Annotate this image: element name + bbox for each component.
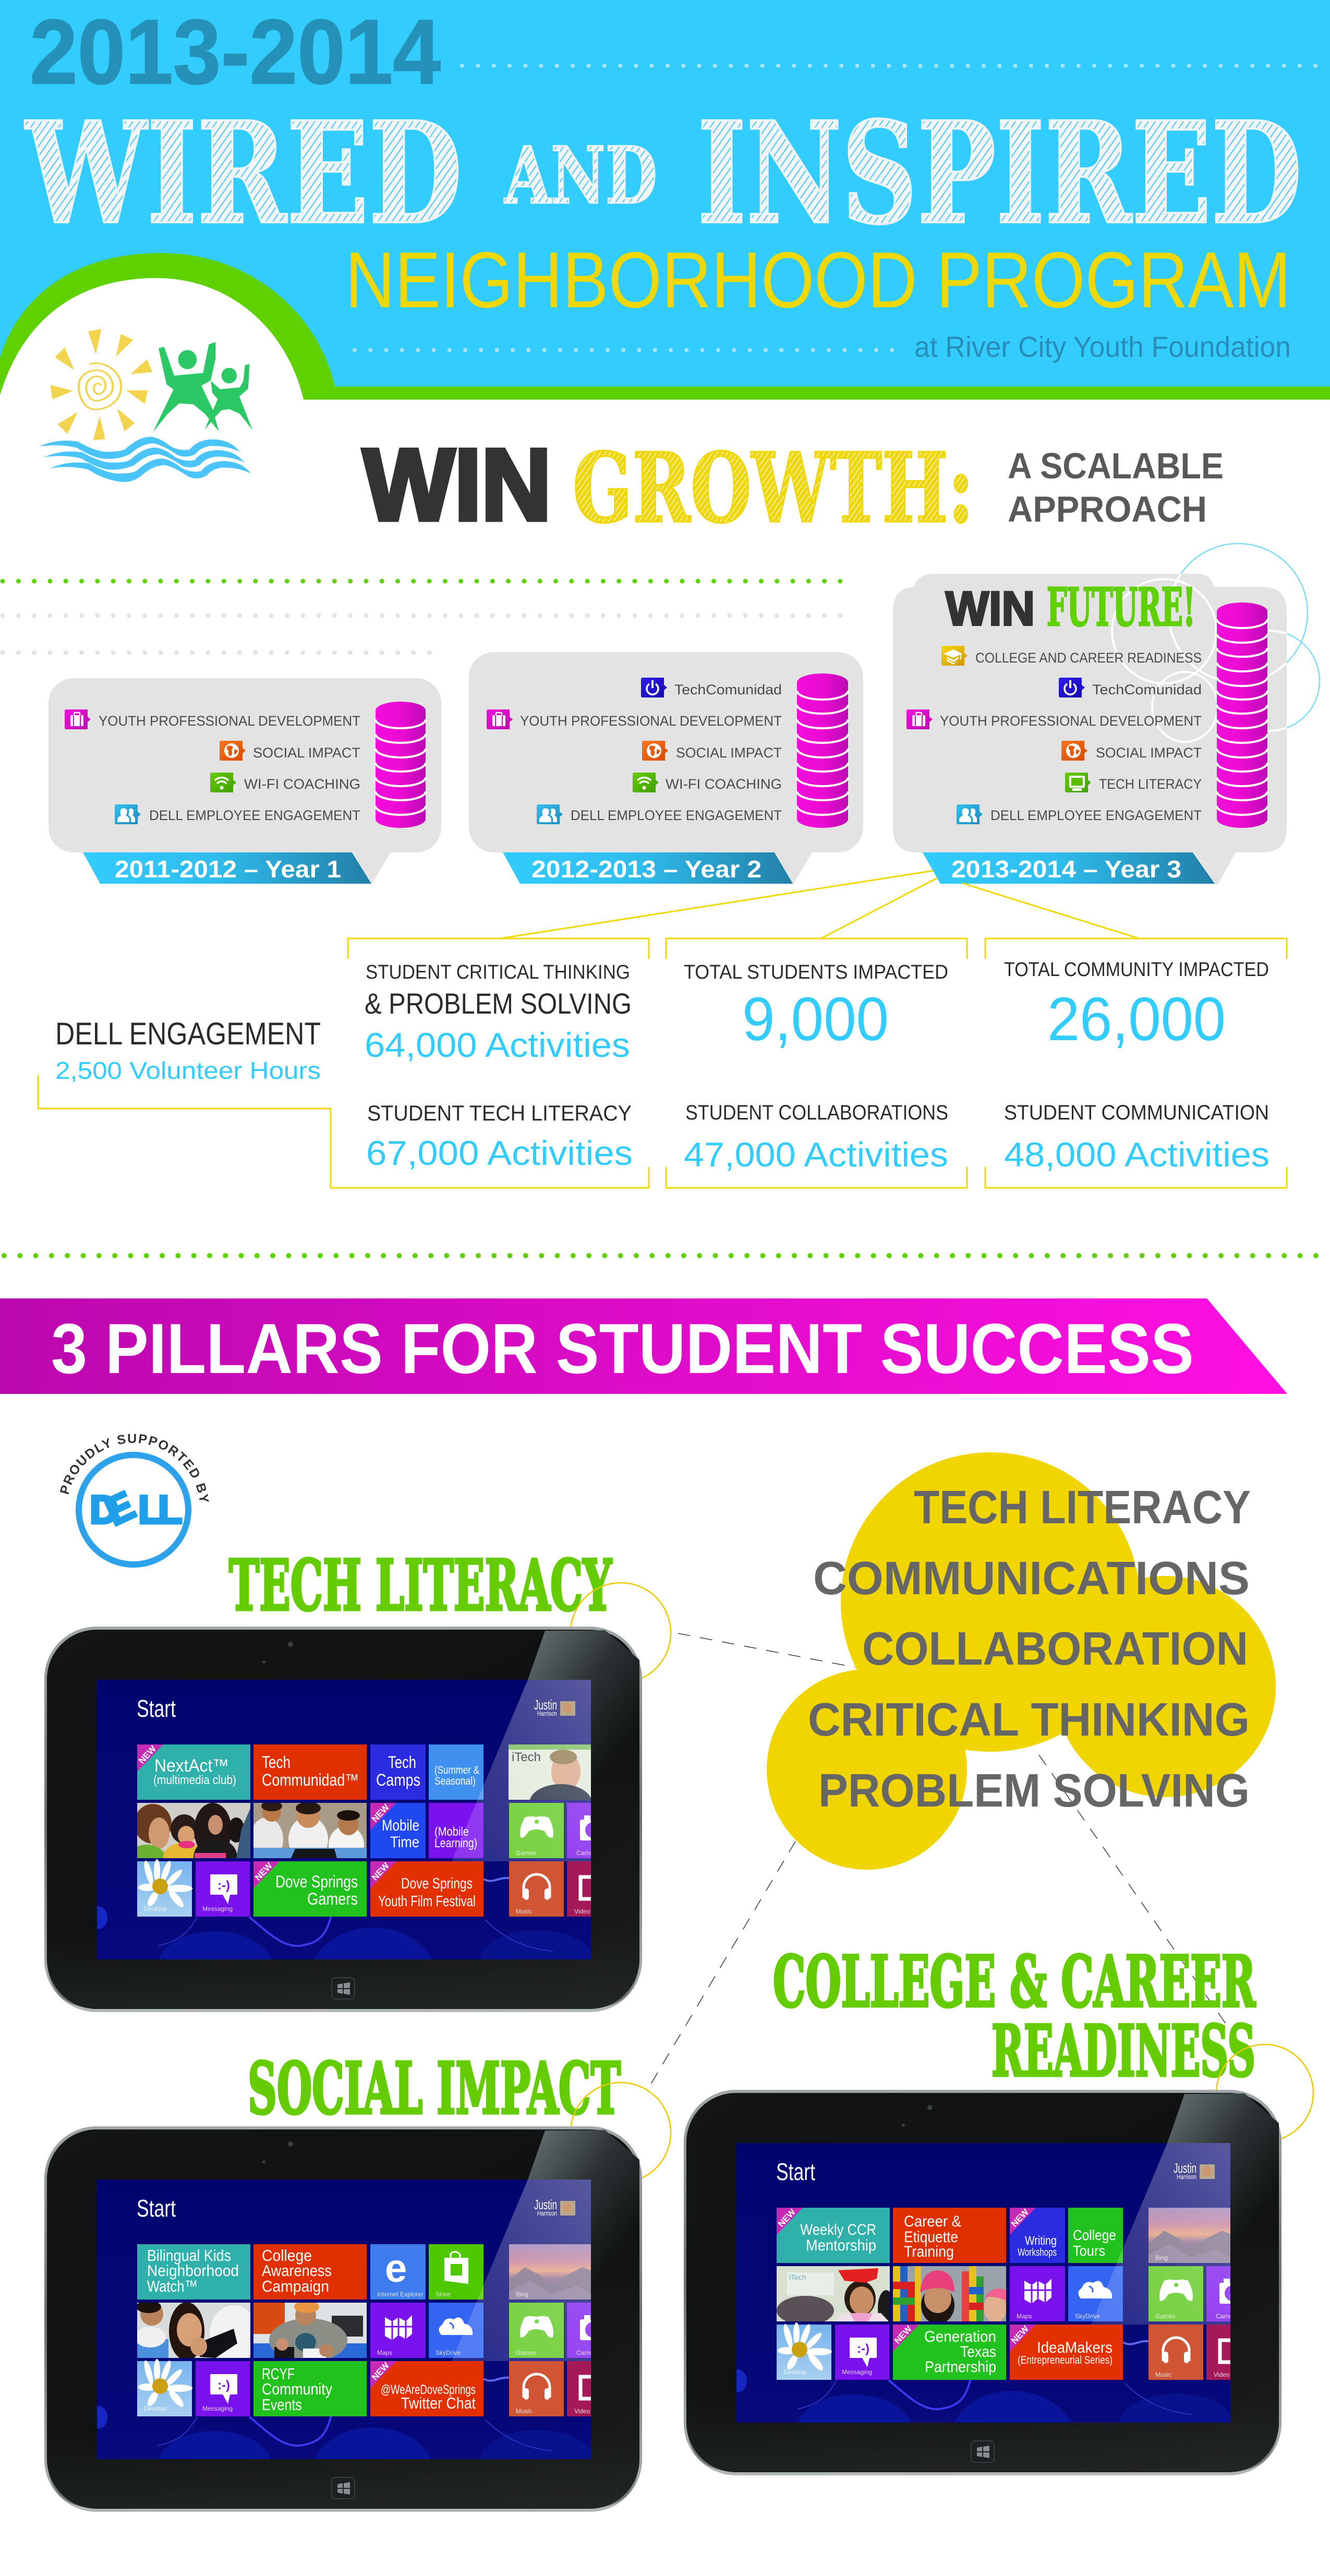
program list: Year 3: COLLEGE AND CAREER READINESS — [975, 650, 1202, 666]
stat: communication — [1004, 1101, 1269, 1174]
program list: Year 2: YOUTH PROFESSIONAL DEVELOPMENT — [520, 713, 782, 729]
tile: Career and Etiquette Training: Career & — [904, 2213, 961, 2230]
heading: WIN FUTURE! — [946, 576, 1195, 638]
program list: Year 2 — [487, 678, 782, 824]
tile: Bilingual Kids Neighborhood Watch: Watch™ — [147, 2277, 198, 2295]
heading: a scalable approach: A SCALABLE — [1008, 446, 1224, 486]
heading: Social Impact: SOCIAL IMPACT — [248, 2047, 621, 2130]
tile: College Awareness Campaign: College — [262, 2246, 312, 2265]
tile: Bilingual Kids Neighborhood Watch: Bilingual Kids — [147, 2246, 231, 2265]
tile: Messaging: Messaging — [842, 2368, 872, 2376]
subtitle: at River City Youth Foundation — [914, 330, 1291, 363]
tile: Desktop: Desktop — [783, 2368, 806, 2376]
tablet: Social Impact — [44, 2126, 642, 2526]
user label — [534, 2197, 575, 2217]
tile: Dove Springs Youth Film Festival: Dove Springs — [401, 1875, 473, 1892]
photo: girl with red cap — [777, 2266, 890, 2321]
tile: NextAct: NEW — [137, 1743, 159, 1766]
tile: Music — [509, 2361, 564, 2416]
tile: Mobile Time: Time — [390, 1834, 419, 1851]
title: year: 2013-2014 — [30, 1, 441, 103]
tile: Generation Texas Partnership: Generation — [924, 2328, 996, 2345]
tile: Dove Springs Gamers: Gamers — [307, 1889, 358, 1908]
tile: Career and Etiquette Training: Training — [904, 2243, 954, 2260]
tile: Twitter Chat: @WeAreDoveSprings — [381, 2382, 476, 2397]
stat: critical thinking: & PROBLEM SOLVING — [365, 987, 632, 1020]
badge: proudly supported by Dell: E — [99, 1483, 141, 1534]
bubble: five skills: CRITICAL THINKING — [808, 1694, 1250, 1746]
ribbon: Year 1 — [83, 852, 371, 884]
stat: Dell engagement — [55, 1016, 321, 1084]
tile: Mobile Time: NEW — [370, 1802, 392, 1824]
tile: Music: Music — [1155, 2371, 1171, 2378]
tile: Maps: Maps — [377, 2349, 392, 2356]
program list: Year 1 — [65, 709, 360, 824]
bubble: five skills: PROBLEM SOLVING — [818, 1765, 1250, 1817]
stat: collaborations: 47,000 Activities — [684, 1135, 948, 1174]
stat: Dell engagement: DELL ENGAGEMENT — [55, 1016, 321, 1051]
tile: Camera — [1206, 2266, 1238, 2321]
tile: NextAct: (multimedia club) — [153, 1773, 236, 1787]
user label: Justin — [1174, 2160, 1196, 2176]
tile: Dove Springs Gamers: NEW — [253, 1860, 275, 1883]
tile: Mobile Time: Mobile — [382, 1817, 419, 1834]
tile: Bing — [1148, 2208, 1230, 2263]
stat: total students — [684, 961, 948, 1054]
tile: Internet Explorer: e — [385, 2246, 407, 2291]
program list: Year 2: DELL EMPLOYEE ENGAGEMENT — [571, 808, 782, 823]
photo: man with orange cap — [253, 2303, 367, 2358]
tile: Writing Workshops: Writing — [1025, 2234, 1057, 2248]
program list: Year 3: TechComunidad — [1092, 682, 1202, 697]
user label: Justin — [534, 2197, 557, 2212]
tile: RCYF Community Events: Events — [262, 2396, 302, 2414]
tile: Twitter Chat — [370, 2360, 483, 2416]
tile: Twitter Chat: Twitter Chat — [401, 2394, 476, 2412]
heading: WIN FUTURE!: FUTURE! — [1047, 576, 1195, 638]
tile: Tech Communidad: Tech — [262, 1753, 291, 1772]
cylinder: Year 1 — [376, 702, 426, 828]
tile: Tech Communidad: Communidad™ — [262, 1771, 359, 1789]
badge: proudly supported by Dell: D — [90, 1488, 118, 1532]
tile: Generation Texas Partnership — [892, 2324, 1006, 2380]
tile: Career and Etiquette Training — [893, 2208, 1006, 2263]
badge: proudly supported by Dell — [59, 1434, 209, 1568]
heading: a scalable approach: APPROACH — [1008, 489, 1207, 529]
tile: Music — [1148, 2325, 1203, 2380]
bubble: five skills: COLLABORATION — [862, 1623, 1248, 1675]
program list: Year 3 — [906, 646, 1202, 824]
tile: Video — [1206, 2325, 1230, 2380]
tile: Summer and Seasonal: Seasonal) — [434, 1775, 476, 1787]
stat: collaborations — [684, 1101, 948, 1174]
stat: total community: TOTAL COMMUNITY IMPACTED — [1004, 959, 1269, 981]
tile: Store: Store — [436, 2291, 451, 2298]
tile: College Tours: College — [1073, 2227, 1116, 2243]
tile: NextAct: NextAct™ — [154, 1756, 229, 1776]
tile: IdeaMakers — [1009, 2324, 1123, 2380]
program list: Year 3: SOCIAL IMPACT — [1096, 745, 1202, 761]
stat: communication: STUDENT COMMUNICATION — [1004, 1101, 1269, 1124]
badge: proudly supported by Dell: L — [138, 1488, 162, 1532]
tile: College Awareness Campaign: Campaign — [262, 2277, 329, 2295]
tile: Summer and Seasonal — [429, 1744, 483, 1800]
heading: WIN GROWTH: GROWTH: — [573, 432, 974, 545]
user label — [1174, 2160, 1215, 2181]
stat: critical thinking — [365, 961, 632, 1064]
stat: total community: 26,000 — [1047, 985, 1226, 1054]
tile: Tech Communidad — [253, 1744, 367, 1800]
tile: Music: Music — [516, 2408, 532, 2415]
tile: Desktop: Desktop — [144, 2405, 167, 2412]
tile: Games: Games — [516, 2349, 536, 2356]
tile: Bing: Bing — [1155, 2254, 1168, 2261]
stat: critical thinking: STUDENT CRITICAL THINKING — [366, 961, 630, 983]
panel: Year 1 — [49, 678, 441, 885]
program list: Year 3: TECH LITERACY — [1099, 776, 1202, 792]
tile: Maps — [1010, 2266, 1065, 2321]
user label: Harrison — [537, 2209, 557, 2217]
tile: Writing Workshops: Workshops — [1018, 2247, 1057, 2258]
tile: Bilingual Kids Neighborhood Watch: Neighborhood — [147, 2261, 239, 2280]
tile: Camera: Camera — [1216, 2313, 1238, 2320]
tile: Dove Springs Gamers — [253, 1860, 367, 1917]
stat: tech literacy — [366, 1101, 633, 1172]
tile: Bilingual Kids Neighborhood Watch — [137, 2244, 250, 2300]
tile: Dove Springs Youth Film Festival — [370, 1860, 483, 1917]
tile: College Tours: Tours — [1073, 2243, 1105, 2259]
heading: a scalable approach — [1008, 446, 1224, 529]
badge: proudly supported by Dell: L — [158, 1488, 182, 1532]
tile: Internet Explorer — [370, 2244, 426, 2300]
tile: Video: Video — [1214, 2371, 1230, 2378]
tile: RCYF Community Events: RCYF — [262, 2365, 295, 2383]
ribbon: Year 3 — [923, 852, 1215, 884]
tile: RCYF Community Events — [253, 2361, 367, 2416]
photo: iTech — [509, 1744, 591, 1800]
heading: WIN FUTURE!: WIN — [946, 582, 1035, 635]
cylinder: Year 3 — [1217, 603, 1267, 828]
tile: Music — [509, 1861, 564, 1917]
tile: Maps: Maps — [1017, 2313, 1032, 2320]
tile: Generation Texas Partnership: Partnership — [925, 2358, 996, 2376]
tile: IdeaMakers: (Entrepreneurial Series) — [1018, 2354, 1113, 2366]
badge: proudly supported by Dell: PROUDLY SUPPORTED BY — [59, 1434, 209, 1502]
stat: total students: 9,000 — [742, 985, 889, 1054]
photo: women at laptop — [137, 1803, 250, 1858]
tile: Messaging — [835, 2325, 889, 2380]
tile: IdeaMakers: IdeaMakers — [1037, 2339, 1113, 2356]
tile: Video: Video — [574, 2408, 590, 2415]
tile: Games — [509, 2303, 564, 2358]
heading: WIN GROWTH: WIN — [363, 428, 551, 541]
stat: total students: TOTAL STUDENTS IMPACTED — [684, 961, 948, 983]
photo: iTech: iTech — [512, 1750, 541, 1764]
stat: tech literacy: STUDENT TECH LITERACY — [367, 1101, 632, 1125]
start label: Start — [137, 2195, 176, 2222]
tile: Internet Explorer: Internet Explorer — [377, 2291, 424, 2298]
user label: Justin — [534, 1697, 557, 1713]
bubble: five skills: TECH LITERACY — [914, 1482, 1251, 1534]
tile: Summer and Seasonal: (Summer & — [434, 1764, 479, 1776]
tile: Messaging: Messaging — [202, 1905, 233, 1912]
program list: Year 3: DELL EMPLOYEE ENGAGEMENT — [990, 808, 1202, 823]
tablet: Tech Literacy — [44, 1627, 642, 2027]
heading: College and Career Readiness — [773, 1940, 1256, 2092]
photo: girl with red cap: iTech — [789, 2273, 806, 2281]
tile: Messaging — [196, 1861, 250, 1917]
tile: IdeaMakers: NEW — [1009, 2324, 1031, 2346]
heading: WIN GROWTH — [363, 428, 974, 545]
tile: Messaging: Messaging — [202, 2405, 233, 2412]
tile: Camera — [567, 2303, 599, 2358]
program list: Year 1: WI-FI COACHING — [244, 776, 360, 792]
tile: Bing — [509, 2244, 591, 2300]
program list: Year 1: SOCIAL IMPACT — [253, 745, 360, 761]
tile: Generation Texas Partnership: NEW — [892, 2324, 914, 2346]
bubble: five skills — [648, 1452, 1276, 2088]
program list: Year 1: YOUTH PROFESSIONAL DEVELOPMENT — [99, 713, 360, 729]
tile: Camera: Camera — [576, 1849, 599, 1857]
title: Wired and Inspired — [23, 91, 1302, 256]
tile: Writing Workshops — [1009, 2207, 1065, 2263]
photo: boys at laptop — [253, 1803, 367, 1858]
tile: Desktop — [137, 2359, 192, 2416]
tile: Weekly CCR Mentorship: NEW — [776, 2207, 798, 2229]
program list: Year 3: YOUTH PROFESSIONAL DEVELOPMENT — [940, 713, 1202, 729]
stat: total community — [1004, 959, 1269, 1054]
tile: Games: Games — [1155, 2313, 1176, 2320]
tile: College Awareness Campaign — [253, 2244, 367, 2300]
tile: Camera — [567, 1803, 599, 1858]
ribbon: Year 2 — [503, 852, 793, 884]
tile: Video — [567, 1861, 591, 1917]
ribbon: Year 2: 2012-2013 – Year 2 — [531, 856, 761, 883]
photo: girl with tablet — [137, 2303, 250, 2358]
tile: NextAct — [137, 1743, 250, 1800]
tile: Weekly CCR Mentorship: Weekly CCR — [800, 2221, 876, 2238]
tile: Writing Workshops: NEW — [1009, 2207, 1031, 2229]
tile: SkyDrive: SkyDrive — [436, 2349, 461, 2356]
tile: College Awareness Campaign: Awareness — [262, 2261, 332, 2280]
tile: Desktop — [137, 1859, 192, 1917]
tile: Dove Springs Gamers: Dove Springs — [275, 1872, 358, 1891]
logo: River City Youth Foundation — [39, 329, 252, 482]
tile: Generation Texas Partnership: Texas — [960, 2343, 996, 2361]
tile: Career and Etiquette Training: Etiquette — [904, 2229, 958, 2246]
tile: College Tours — [1068, 2208, 1123, 2263]
tile: Games — [1148, 2266, 1203, 2321]
title: Wired and Inspired: WIRED — [23, 91, 462, 256]
tile: Mobile Learning — [429, 1803, 483, 1858]
tile: SkyDrive — [1068, 2266, 1123, 2321]
tile: Games: Games — [516, 1849, 536, 1857]
stat: tech literacy: 67,000 Activities — [366, 1134, 633, 1172]
user label: Harrison — [537, 1710, 557, 1717]
bubble: five skills: COMMUNICATIONS — [813, 1552, 1250, 1605]
tile: Desktop — [777, 2322, 832, 2380]
tablet: College and Career Readiness — [684, 2090, 1281, 2490]
photo: lego and firefighter hat — [893, 2266, 1006, 2321]
tile: Mobile Learning: (Mobile — [434, 1825, 469, 1839]
panel: Year 3 WIN Future — [893, 574, 1287, 885]
stat: communication: 48,000 Activities — [1004, 1135, 1269, 1174]
panel: Year 2 — [469, 652, 863, 885]
user label — [534, 1697, 575, 1717]
ribbon: Year 3: 2013-2014 – Year 3 — [951, 856, 1181, 883]
stat: critical thinking: 64,000 Activities — [365, 1026, 630, 1064]
start label: Start — [137, 1695, 176, 1722]
tile: Twitter Chat: NEW — [370, 2360, 392, 2382]
banner: 3 pillars: 3 PILLARS FOR STUDENT SUCCESS — [51, 1309, 1194, 1388]
tile: Dove Springs Youth Film Festival: NEW — [370, 1860, 392, 1883]
tile: Tech Camps — [370, 1744, 426, 1800]
tile: Mobile Time — [370, 1802, 426, 1858]
tile: Video — [567, 2361, 591, 2416]
tile: Weekly CCR Mentorship — [776, 2207, 890, 2263]
header background — [0, 0, 1330, 400]
stat: Dell engagement: 2,500 Volunteer Hours — [55, 1057, 321, 1084]
ribbon: Year 1: 2011-2012 – Year 1 — [115, 856, 341, 883]
cylinder: Year 2 — [797, 673, 848, 828]
program list: Year 2: SOCIAL IMPACT — [676, 745, 782, 761]
tile: Video: Video — [574, 1908, 590, 1915]
program list: Year 1: DELL EMPLOYEE ENGAGEMENT — [149, 808, 360, 823]
tile: Dove Springs Youth Film Festival: Youth Film Festival — [378, 1893, 476, 1910]
program list: Year 2: WI-FI COACHING — [666, 776, 782, 792]
tile: Games — [509, 1803, 564, 1858]
tile: RCYF Community Events: Community — [262, 2380, 332, 2398]
tile: SkyDrive — [429, 2303, 483, 2358]
tile: Desktop: Desktop — [144, 1905, 167, 1912]
stat: collaborations: STUDENT COLLABORATIONS — [685, 1101, 948, 1124]
start label: Start — [776, 2158, 815, 2185]
user label: Harrison — [1177, 2173, 1196, 2181]
title: Wired and Inspired: AND — [504, 130, 657, 222]
tile: Weekly CCR Mentorship: Mentorship — [806, 2237, 876, 2254]
tile: Music: Music — [516, 1908, 532, 1915]
tile: Tech Camps: Tech — [388, 1753, 416, 1772]
program list: Year 2: TechComunidad — [674, 682, 782, 697]
tile: Bing: Bing — [516, 2291, 528, 2298]
tile: Tech Camps: Camps — [376, 1771, 420, 1789]
tile: Store — [429, 2244, 483, 2300]
tile: Mobile Learning: Learning) — [434, 1836, 477, 1850]
tile: SkyDrive: SkyDrive — [1075, 2313, 1100, 2320]
tile: Messaging — [196, 2361, 250, 2416]
tile: Camera: Camera — [576, 2349, 599, 2356]
heading: Tech Literacy: TECH LITERACY — [229, 1544, 612, 1627]
tile: Maps — [370, 2303, 426, 2358]
